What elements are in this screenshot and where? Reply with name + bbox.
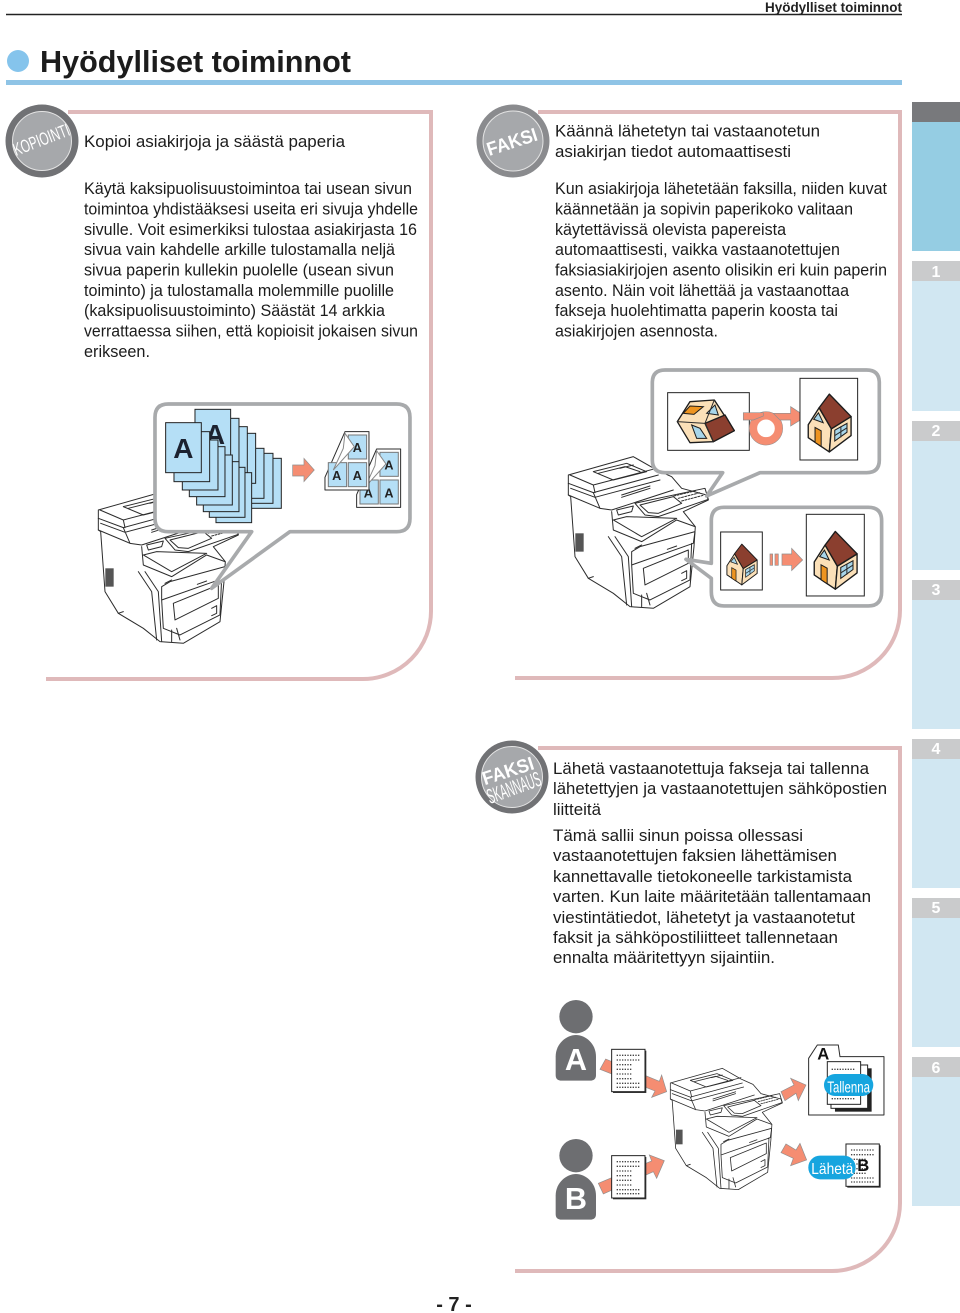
icon: booklet front: A [353,441,362,455]
body text: copying: toiminto) ja tulostamalla molemmille puolille [84,281,394,300]
badge: FAKSI SKANNAUS: FAKSI [480,754,537,790]
body text: copying [84,179,418,361]
icon: sent document: B [857,1156,869,1175]
arrow: A to printer [600,1059,667,1097]
body text: forwarding: Tämä sallii sinun poissa ollessasi [553,826,803,845]
body text: copying: toimintoa yhdistääksesi useita eri sivuja yhdelle [84,200,418,218]
body text: copying: sivua paperin kullekin puolelle (usean sivun [84,260,394,280]
panel: forwarding [476,740,900,1271]
heading: copying: Kopioi asiakirjoja ja säästä paperia [84,132,346,151]
heading: forwarding: lähetettyjen ja vastaanotettujen sähköpostien [553,779,887,798]
side tabs [912,102,960,1206]
icon: booklet front: A [332,469,341,483]
body text: fax rotation [555,179,887,340]
icon: fax document B [612,1156,646,1199]
icon: fax document A [612,1049,646,1093]
icon: sent document: Lähetä [811,1161,854,1178]
icon: large page [806,514,864,596]
icon: page stacks: A [173,433,193,464]
body text: copying: (kaksipuolisuustoiminto) Säästät 14 arkkia [84,301,386,320]
arrow: B to printer [598,1155,664,1194]
icon: upright page [800,378,858,460]
side tabs: 1 [932,264,941,281]
side tabs: 5 [932,900,941,917]
body text: fax rotation: asiakirjojen asennosta. [555,322,718,340]
body text: forwarding [553,826,871,967]
arrow: to duplex [293,458,314,482]
title: Hyödylliset toiminnot [40,44,351,79]
body text: copying: erikseen. [84,342,150,361]
icon: booklet back [357,449,401,507]
body text: copying: Käytä kaksipuolisuustoimintoa tai usean sivun [84,179,412,198]
icon: storage folder: Tallenna [827,1080,870,1097]
body text: forwarding: varten. Kun laite määritetään tallentamaan [553,887,871,906]
icon: page stacks: A [205,419,225,450]
callout: pages combined [155,404,410,588]
icon: user B [556,1139,596,1220]
panel: copying [6,104,431,679]
badge: KOPIOINTI: KOPIOINTI [10,120,73,160]
icon: booklet back: A [384,458,394,472]
body text: forwarding: kannettavalle tietokoneelle tarkistamista [553,867,853,886]
body text: forwarding: vastaanotettujen faksien lähettämisen [553,846,837,865]
callout: scale image [686,507,882,606]
body text: fax rotation: asento. Näin voit lähettää ja vastaanottaa [555,281,850,300]
body text: fax rotation: käännetään ja sopivin paperikoko valitaan [555,200,853,218]
badge: FAKSI SKANNAUS [476,740,548,814]
heading: forwarding: Lähetä vastaanotettuja fakseja tai tallenna [553,759,870,778]
icon: storage folder [809,1045,884,1115]
icon: rotated page [668,393,749,450]
heading: forwarding [553,759,887,819]
icon: user A: A [565,1043,587,1077]
illustration: forwarding workflow [556,1000,884,1220]
body text: fax rotation: Kun asiakirjoja lähetetään faksilla, niiden kuvat [555,179,887,198]
body text: forwarding: faksit ja sähköpostiliitteet tallennetaan [553,928,838,947]
arrow: enlarge [770,548,803,571]
callout: rotate image [652,370,879,496]
illustration: copying printer [98,492,238,643]
body text: copying: sivulle. Voit esimerkiksi tulostaa asiakirjasta 16 [84,220,417,239]
badge: FAKSI [476,104,550,178]
side tabs: 3 [932,582,941,599]
arrow: to folder [781,1078,806,1101]
icon: page stacks [166,409,281,523]
illustration: forwarding printer [670,1068,782,1190]
icon: booklet front [325,432,369,490]
icon: booklet back: A [384,486,394,500]
body text: fax rotation: faksiasiakirjojen asento olisikin eri kuin paperin [555,260,887,280]
icon: sent document [808,1144,881,1188]
heading: fax rotation: asiakirjan tiedot automaattisesti [555,142,791,161]
badge: FAKSI: FAKSI [484,125,540,161]
badge: KOPIOINTI [6,104,78,178]
badge: FAKSI SKANNAUS: SKANNAUS [484,768,544,809]
side tabs: 2 [932,423,941,440]
icon: user A [556,1000,596,1081]
side tabs: 6 [932,1060,941,1077]
body text: fax rotation: fakseja huolehtimatta paperin koosta tai [555,301,838,320]
title [6,44,902,85]
icon: booklet front: A [353,469,362,483]
arrow: to recipient [781,1143,807,1166]
body text: forwarding: viestintätiedot, lähetetyt ja vastaanotetut [553,908,855,927]
icon: storage folder: A [817,1045,829,1064]
heading: fax rotation [555,122,820,161]
illustration: fax printer [568,457,708,608]
heading: fax rotation: Käännä lähetetyn tai vastaanotetun [555,122,820,140]
icon: booklet back: A [364,486,373,500]
heading: forwarding: liitteitä [553,800,602,819]
body text: copying: sivua vain kahdelle arkille tulostamalla neljä [84,240,396,259]
side tabs: 4 [932,741,941,758]
icon: small page [721,532,762,590]
body text: fax rotation: käytettävissä olevista papereista [555,220,787,239]
panel: fax rotation [476,104,900,678]
body text: copying: verrattaessa siihen, että kopioisit jokaisen sivun [84,322,418,340]
arrow: rotate [743,407,806,441]
page header: Hyödylliset toiminnot [765,0,902,15]
icon: user B: B [565,1182,587,1216]
body text: forwarding: ennalta määritettyyn sijaintiin. [553,948,775,967]
body text: fax rotation: automaattisesti, vaikka vastaanotettujen [555,240,840,259]
